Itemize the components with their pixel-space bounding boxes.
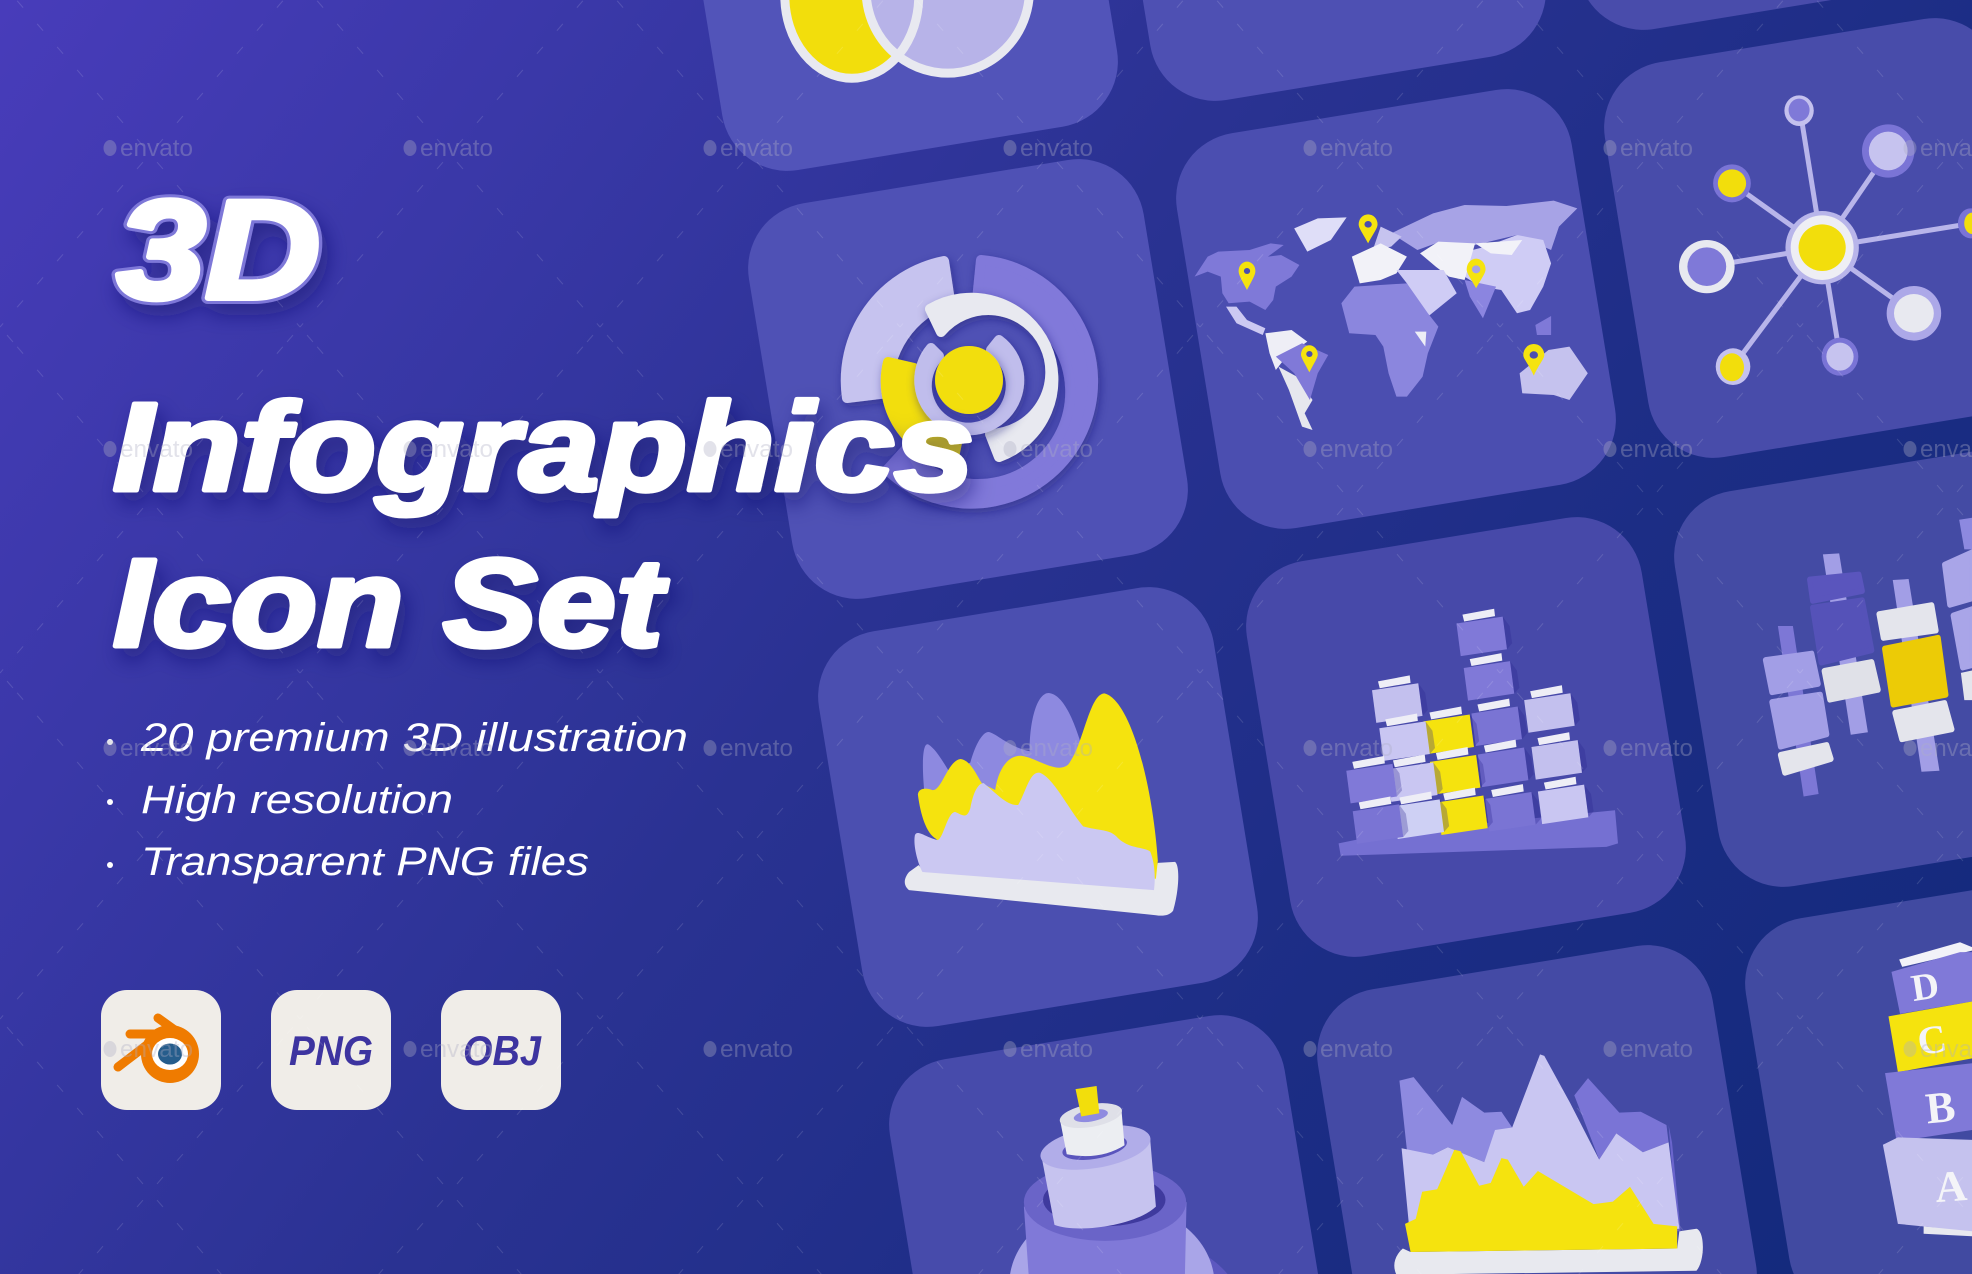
panel: stacked blocks card: [1236, 507, 1696, 967]
icon: block bar chart: [1339, 609, 1618, 856]
envato watermarks: envato: [420, 436, 493, 463]
envato watermarks: enva: [1920, 1036, 1972, 1063]
badge: PNG: PNG: [289, 1027, 373, 1074]
envato watermarks: enva: [1920, 135, 1972, 162]
envato watermarks: envato: [420, 1036, 493, 1063]
badge: PNG: [271, 990, 391, 1110]
icon: smooth area chart: [905, 693, 1178, 916]
panel: donut chart card: [738, 149, 1198, 609]
envato watermarks: envato: [1320, 135, 1393, 162]
icon: world map with pins: [1195, 201, 1588, 430]
icon: network diagram: [1679, 95, 1972, 385]
envato watermarks: envato: [1320, 1036, 1393, 1063]
icon: jagged area chart: [1394, 1054, 1703, 1274]
icon: ABCD letter blocks: D: [1908, 964, 1942, 1010]
icon: donut chart: [846, 260, 1093, 504]
envato watermarks: envato: [1620, 135, 1693, 162]
envato watermarks: envato: [1020, 1036, 1093, 1063]
icon: venn diagram: [785, 0, 1029, 78]
title: 3D: 3D: [117, 171, 320, 328]
envato watermarks: envato: [1620, 735, 1693, 762]
envato watermarks: envato: [720, 436, 793, 463]
envato watermarks: envato: [720, 735, 793, 762]
envato watermarks: [104, 135, 1972, 1063]
envato watermarks: envato: [120, 436, 193, 463]
envato watermarks: envato: [1320, 436, 1393, 463]
feature list: High resolution: [141, 778, 453, 822]
icon: Blender logo: [118, 1018, 199, 1083]
envato watermarks: envato: [120, 1036, 193, 1063]
title: Infographics Icon Set: [113, 378, 974, 673]
title: Infographics Icon Set: Infographics: [113, 378, 974, 517]
panel: top middle card: [1096, 0, 1556, 111]
feature list: 20 premium 3D illustration: [140, 716, 688, 760]
feature list: [107, 716, 688, 884]
panel: venn diagram card: [668, 0, 1128, 181]
envato watermarks: envato: [1620, 1036, 1693, 1063]
envato watermarks: enva: [1920, 436, 1972, 463]
envato watermarks: envato: [120, 135, 193, 162]
envato watermarks: enva: [1920, 735, 1972, 762]
icon: ABCD letter blocks: B: [1923, 1082, 1958, 1133]
envato watermarks: envato: [1620, 436, 1693, 463]
icon: ABCD letter blocks: C: [1914, 1015, 1950, 1064]
envato watermarks: envato: [120, 735, 193, 762]
envato watermarks: envato: [1320, 735, 1393, 762]
feature list: Transparent PNG files: [141, 840, 589, 884]
panel: top right card: [1524, 0, 1972, 40]
panel: network diagram card: [1594, 8, 1972, 468]
title: 3D: 3D: [117, 171, 320, 328]
envato watermarks: envato: [720, 1036, 793, 1063]
icon: layered cylinder stack: [1009, 1086, 1242, 1274]
panel: mountain area chart card: [1307, 935, 1767, 1274]
icon: ABCD letter blocks: [1883, 942, 1972, 1236]
icon: candlestick chart: [1765, 518, 1972, 796]
badge: OBJ: [441, 990, 561, 1110]
envato watermarks: envato: [1020, 735, 1093, 762]
envato watermarks: envato: [420, 735, 493, 762]
badge: Blender: [101, 990, 221, 1110]
panel: world map card: [1166, 79, 1626, 539]
envato watermarks: envato: [1020, 135, 1093, 162]
badge: OBJ: OBJ: [463, 1027, 542, 1074]
panel: area chart card: [808, 577, 1268, 1037]
title: Infographics Icon Set: Icon Set: [113, 534, 668, 673]
panel: concentric stack card: [879, 1005, 1339, 1274]
panel: candlestick card: [1664, 437, 1972, 897]
envato watermarks: envato: [720, 135, 793, 162]
icon: ABCD letter blocks: A: [1933, 1161, 1969, 1212]
envato watermarks: envato: [1020, 436, 1093, 463]
envato watermarks: envato: [420, 135, 493, 162]
panel: letter blocks card: [1735, 864, 1972, 1274]
